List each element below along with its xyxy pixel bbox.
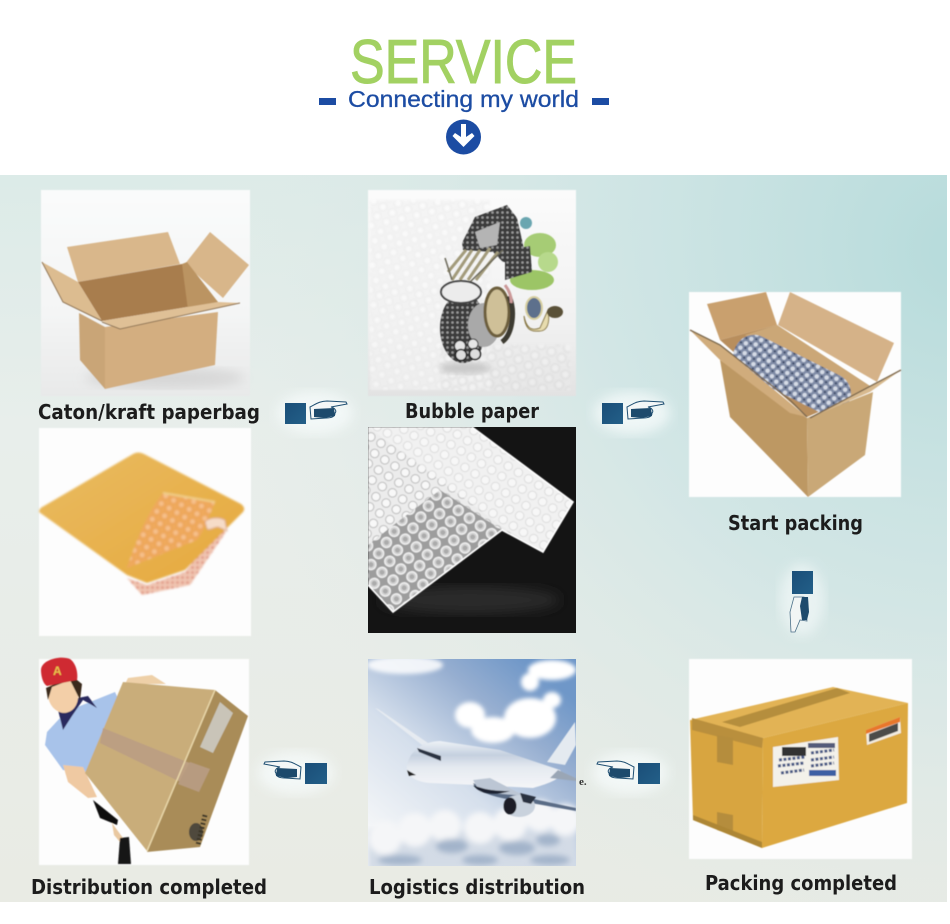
label: Caton/kraft paperbag: Caton/kraft paperbag — [38, 400, 260, 424]
icon: pointing hand left 1 — [258, 752, 334, 794]
photo: packed box — [689, 659, 912, 859]
icon: pointing hand right 1 — [277, 392, 353, 434]
photo: bubble wrap on black — [368, 427, 576, 633]
photo: box with bubble roll — [689, 292, 901, 497]
stray text: e.: e. — [579, 776, 587, 788]
photo: padded kraft envelope — [39, 428, 251, 636]
photo: delivery man with box: A — [53, 664, 62, 678]
title: SERVICE: SERVICE — [350, 28, 577, 97]
label: Distribution completed: Distribution completed — [31, 875, 267, 899]
label: Start packing: Start packing — [728, 511, 863, 535]
photo: delivery man with box — [39, 658, 249, 865]
label: Packing completed: Packing completed — [705, 871, 897, 895]
icon: pointing hand left 2 — [592, 752, 668, 794]
label: Logistics distribution: Logistics distribution — [369, 875, 585, 899]
photo: airplane in sky — [367, 656, 581, 870]
icon: pointing hand right 2 — [594, 392, 670, 434]
photo: jewelry in bubble paper — [368, 190, 576, 396]
subtitle: Connecting my world: Connecting my world — [348, 86, 579, 112]
background panel — [0, 175, 947, 902]
photo: open cardboard box — [41, 190, 250, 396]
label: Bubble paper: Bubble paper — [405, 399, 539, 423]
icon: pointing hand down — [780, 564, 824, 636]
icon: down arrow — [446, 120, 481, 154]
